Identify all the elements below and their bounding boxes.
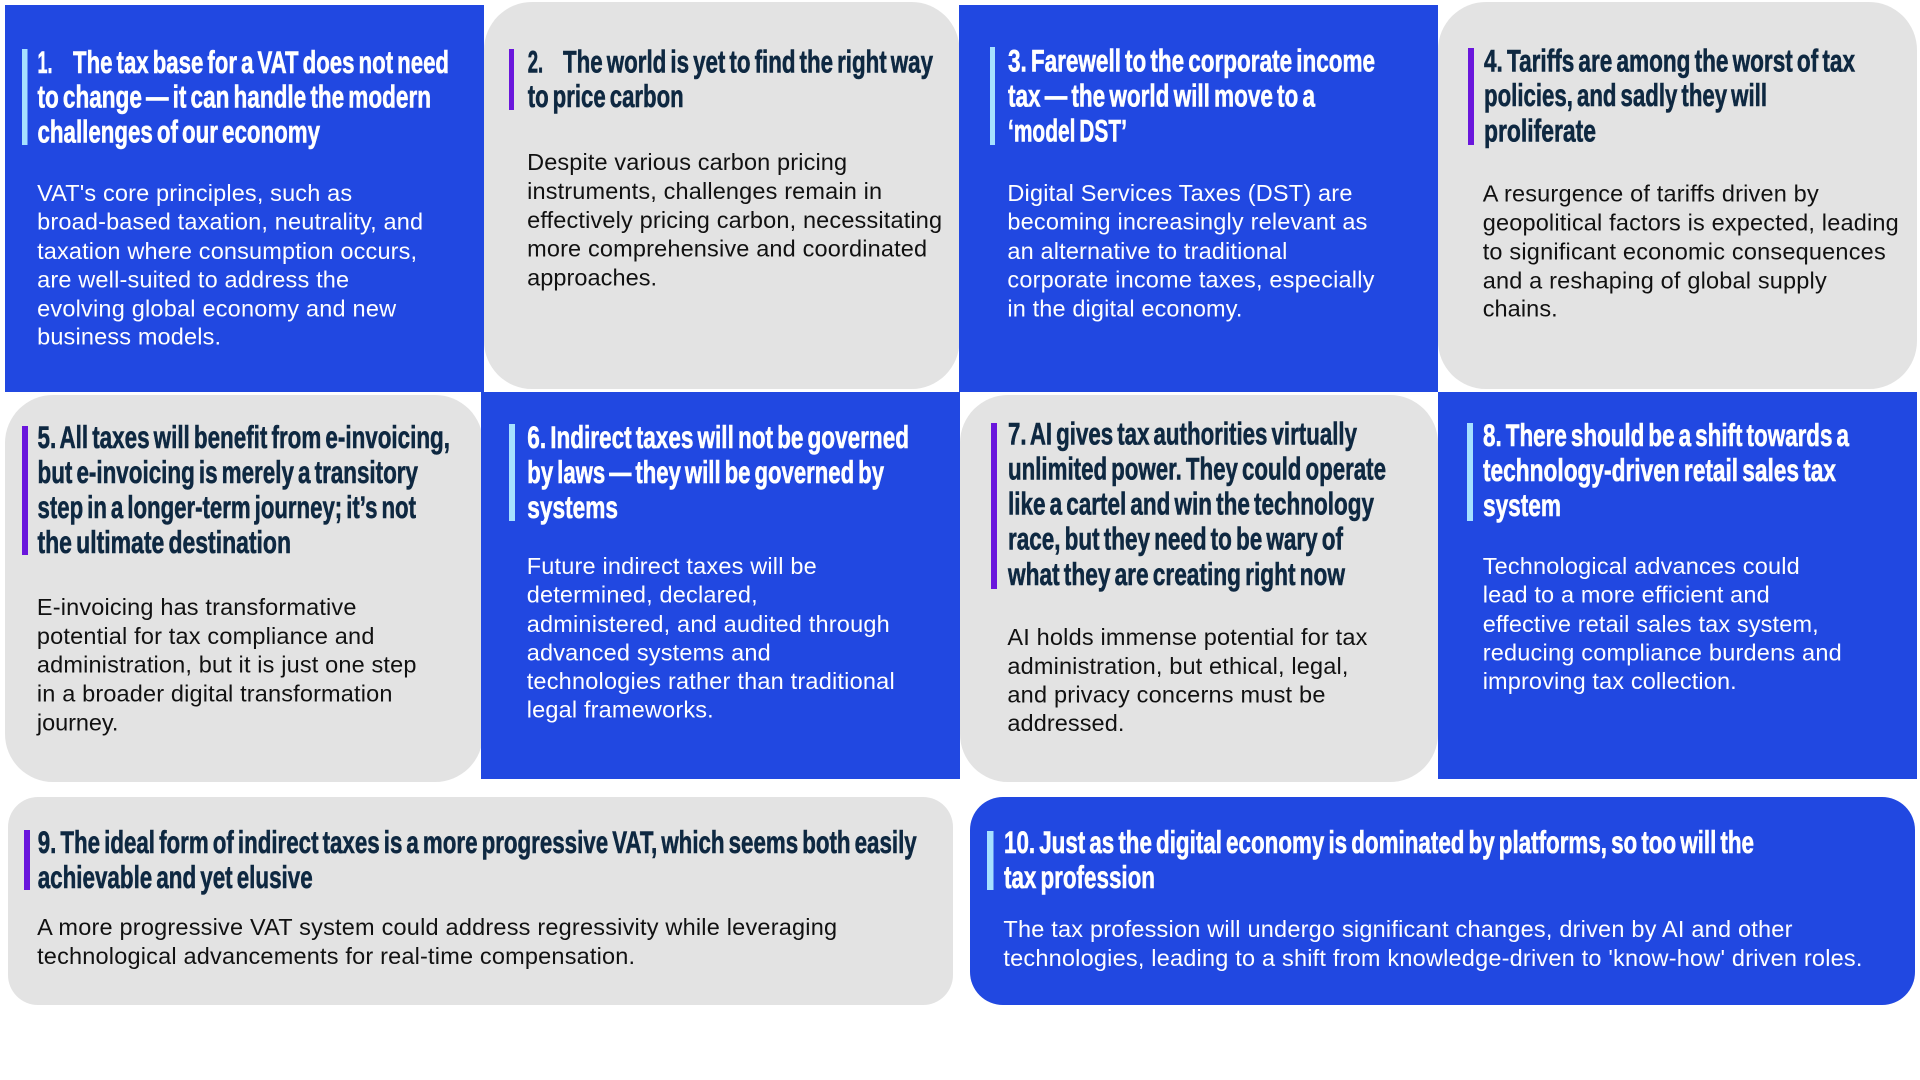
panel 5 body text: in a broader digital transformation bbox=[37, 681, 392, 707]
panel 2: carbon pricing bbox=[484, 2, 960, 389]
panel 7 body text: administration, but ethical, legal, bbox=[1007, 653, 1348, 679]
panel 9 body text: technological advancements for real-time compensation. bbox=[37, 943, 635, 969]
panel 6 heading: systems bbox=[527, 489, 618, 525]
panel 6 heading: 6. Indirect taxes will not be governed bbox=[527, 419, 909, 455]
panel 6: governed by systems bbox=[481, 392, 960, 779]
panel 5 heading: but e-invoicing is merely a transitory bbox=[38, 454, 418, 490]
panel 4 accent bar bbox=[1468, 48, 1474, 145]
panel 7 heading: 7. AI gives tax authorities virtually bbox=[1008, 416, 1357, 452]
panel 3 heading: tax — the world will move to a bbox=[1008, 77, 1315, 113]
panel 6 body text: Future indirect taxes will be bbox=[527, 553, 817, 579]
panel 4 body text bbox=[1483, 181, 1899, 322]
panel 8 heading: system bbox=[1483, 487, 1561, 523]
panel 9 accent bar bbox=[24, 830, 30, 890]
panel 9 body text: A more progressive VAT system could address regressivity while leveraging bbox=[37, 914, 837, 940]
panel 9 heading bbox=[38, 824, 917, 895]
panel 3 accent bar bbox=[990, 47, 995, 145]
panel 7 heading: like a cartel and win the technology bbox=[1008, 486, 1374, 522]
panel 2 background bbox=[484, 2, 960, 389]
panel 10 body text: The tax profession will undergo significant changes, driven by AI and other bbox=[1003, 916, 1793, 942]
panel 5 body text bbox=[36, 594, 416, 736]
panel 5 body text: E-invoicing has transformative bbox=[37, 594, 356, 620]
panel 3 heading bbox=[1008, 42, 1375, 148]
panel 3 heading: ‘model DST’ bbox=[1008, 112, 1127, 148]
panel 1 body text: evolving global economy and new bbox=[37, 296, 397, 322]
panel 7 body text: addressed. bbox=[1007, 710, 1124, 736]
panel 9 body text bbox=[37, 914, 837, 969]
panel 7 heading: what they are creating right now bbox=[1007, 556, 1345, 592]
panel 7 body text bbox=[1007, 624, 1368, 736]
panel 1 body text: VAT's core principles, such as bbox=[37, 180, 352, 206]
panel 6 body text bbox=[527, 553, 895, 723]
panel 10 accent bar bbox=[987, 831, 994, 890]
panel 4 heading: policies, and sadly they will bbox=[1484, 77, 1767, 113]
panel 7 body text: and privacy concerns must be bbox=[1007, 682, 1325, 708]
panel 6 heading: by laws — they will be governed by bbox=[527, 454, 884, 490]
panel 1 heading: The tax base for a VAT does not need bbox=[73, 44, 449, 80]
panel 4: tariffs bbox=[1438, 2, 1917, 389]
panel 4 body text: A resurgence of tariffs driven by bbox=[1483, 181, 1819, 207]
panel 9: progressive VAT bbox=[8, 797, 953, 1005]
panel 7 accent bar bbox=[991, 423, 997, 589]
panel 2 heading: to price carbon bbox=[528, 78, 684, 114]
panel 5 heading: 5. All taxes will benefit from e-invoicing, bbox=[38, 419, 450, 455]
panel 5 body text: journey. bbox=[36, 710, 118, 736]
panel 6 body text: technologies rather than traditional bbox=[527, 668, 895, 694]
panel 6 body text: legal frameworks. bbox=[527, 697, 714, 723]
panel 7: AI and tax authorities bbox=[960, 395, 1438, 782]
panel 2 body text: effectively pricing carbon, necessitating bbox=[527, 207, 942, 233]
panel 1 heading: 1. bbox=[38, 44, 52, 80]
panel 5: e-invoicing bbox=[5, 395, 483, 782]
panel 2 body text: instruments, challenges remain in bbox=[527, 178, 882, 204]
panel 8 heading bbox=[1483, 417, 1849, 523]
panel 8 accent bar bbox=[1467, 423, 1473, 521]
panel 8 body text: improving tax collection. bbox=[1483, 668, 1737, 694]
panel 6 body text: determined, declared, bbox=[527, 582, 758, 608]
panel 10 heading bbox=[1004, 824, 1754, 895]
panel 3 heading: 3. Farewell to the corporate income bbox=[1008, 42, 1375, 78]
panel 5 background bbox=[5, 395, 483, 782]
panel 7 heading bbox=[1007, 416, 1386, 592]
panel 6 body text: administered, and audited through bbox=[527, 611, 890, 637]
panel 1 accent bar bbox=[22, 49, 28, 145]
panel 6 accent bar bbox=[509, 424, 515, 521]
panel 4 heading: proliferate bbox=[1484, 112, 1596, 148]
panel 6 background bbox=[481, 392, 960, 779]
panel 4 body text: geopolitical factors is expected, leading bbox=[1483, 210, 1899, 236]
panel 2 heading: 2. bbox=[528, 43, 543, 79]
panel 10 background bbox=[970, 797, 1915, 1005]
panel 8 body text: Technological advances could bbox=[1483, 553, 1800, 579]
panel 4 heading bbox=[1484, 43, 1855, 148]
panel 8 body text: effective retail sales tax system, bbox=[1483, 611, 1819, 637]
panel 1 body text: broad-based taxation, neutrality, and bbox=[37, 209, 423, 235]
panel 1 body text bbox=[37, 180, 423, 349]
panel 9 heading: 9. The ideal form of indirect taxes is a more progressive VAT, which seems both easily bbox=[38, 824, 917, 860]
panel 5 body text: administration, but it is just one step bbox=[37, 652, 416, 678]
panel 4 body text: chains. bbox=[1483, 296, 1558, 322]
panel 10 heading: tax profession bbox=[1004, 859, 1155, 895]
panel 5 accent bar bbox=[22, 426, 28, 555]
panel 3 body text bbox=[1007, 180, 1375, 322]
panel 1 heading bbox=[38, 44, 449, 149]
panel 6 heading bbox=[527, 419, 909, 525]
panel 3 body text: an alternative to traditional bbox=[1007, 238, 1287, 264]
panel 1 background bbox=[5, 5, 484, 392]
panel 2 heading: The world is yet to find the right way bbox=[563, 43, 933, 79]
panel 2 accent bar bbox=[509, 49, 514, 110]
panel 9 background bbox=[8, 797, 953, 1005]
panel 8 body text: lead to a more efficient and bbox=[1483, 582, 1770, 608]
panel 3 body text: in the digital economy. bbox=[1007, 296, 1242, 322]
panel 5 heading bbox=[38, 419, 450, 560]
panel 10 body text: technologies, leading to a shift from knowledge-driven to 'know-how' driven roles. bbox=[1003, 945, 1862, 971]
panel 5 heading: the ultimate destination bbox=[38, 524, 291, 560]
panel 1 body text: business models. bbox=[37, 323, 221, 349]
panel 4 background bbox=[1438, 2, 1917, 389]
panel 8 background bbox=[1438, 392, 1917, 779]
panel 2 body text: approaches. bbox=[527, 265, 657, 291]
panel 2 body text: Despite various carbon pricing bbox=[527, 149, 847, 175]
panel 3 body text: becoming increasingly relevant as bbox=[1007, 209, 1367, 235]
panel 8: retail sales tax bbox=[1438, 392, 1917, 779]
panel 3: corporate income tax bbox=[959, 5, 1438, 392]
panel 2 heading bbox=[528, 43, 933, 114]
panel 3 body text: corporate income taxes, especially bbox=[1007, 267, 1375, 293]
panel 7 heading: race, but they need to be wary of bbox=[1008, 521, 1343, 557]
panel 4 body text: and a reshaping of global supply bbox=[1483, 267, 1827, 293]
panel 3 background bbox=[959, 5, 1438, 392]
panel 1 heading: challenges of our economy bbox=[38, 113, 320, 149]
panel 7 heading: unlimited power. They could operate bbox=[1008, 451, 1386, 487]
panel 10: tax profession platforms bbox=[970, 797, 1915, 1005]
panel 1 body text: taxation where consumption occurs, bbox=[37, 238, 417, 264]
panel 5 body text: potential for tax compliance and bbox=[37, 623, 374, 649]
panel 5 heading: step in a longer-term journey; it’s not bbox=[38, 489, 416, 525]
panel 1: VAT tax base bbox=[5, 5, 484, 392]
panel 1 heading: to change — it can handle the modern bbox=[38, 79, 431, 115]
panel 10 body text bbox=[1003, 916, 1862, 971]
panel 2 body text bbox=[527, 149, 942, 291]
panel 8 body text: reducing compliance burdens and bbox=[1483, 639, 1842, 665]
panel 4 body text: to significant economic consequences bbox=[1483, 238, 1886, 264]
panel 8 body text bbox=[1483, 553, 1842, 694]
panel 1 body text: are well-suited to address the bbox=[37, 267, 349, 293]
panel 7 body text: AI holds immense potential for tax bbox=[1007, 624, 1368, 650]
panel 7 background bbox=[960, 395, 1438, 782]
panel 9 heading: achievable and yet elusive bbox=[38, 859, 313, 895]
panel 3 body text: Digital Services Taxes (DST) are bbox=[1007, 180, 1352, 206]
panel 2 body text: more comprehensive and coordinated bbox=[527, 236, 927, 262]
panel 6 body text: advanced systems and bbox=[527, 639, 771, 665]
